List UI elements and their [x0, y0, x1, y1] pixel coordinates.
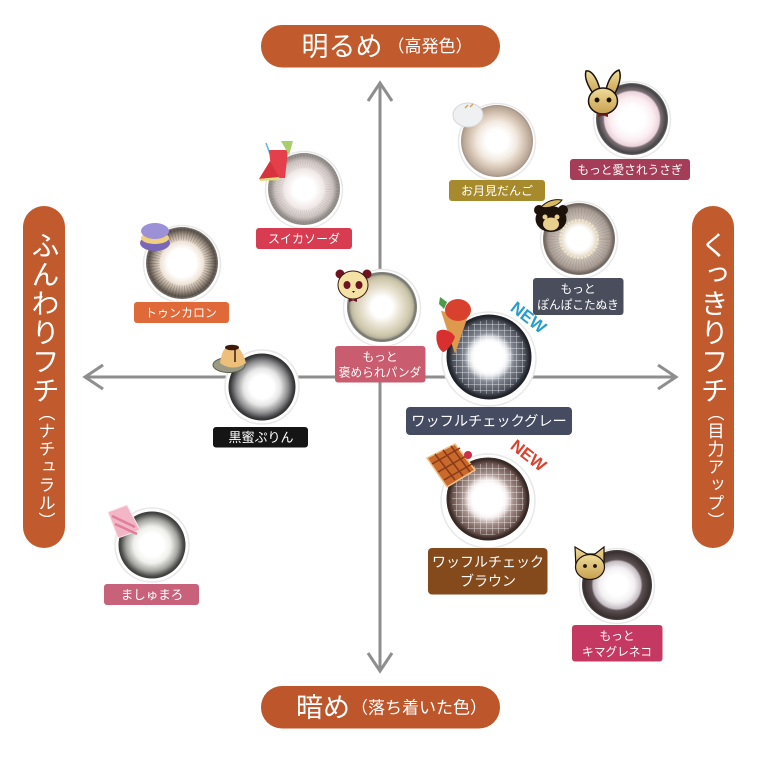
- label: もっとぽんぽこたぬき: ぽんぽこたぬき: [537, 299, 619, 312]
- heading: right くっきりフチ: [692, 206, 734, 548]
- label: 黒蜜ぷりん: [213, 427, 308, 448]
- heading: left ふんわりフチ: ふんわりフチ: [28, 231, 60, 405]
- icon: strawberry crepe: [436, 297, 471, 354]
- icon: white dango rabbit: [453, 103, 483, 127]
- heading: bottom 暗め: 暗め: [296, 693, 350, 723]
- heading: bottom 暗め: （落ち着いた色）: [351, 698, 487, 718]
- lens: もっと愛されうさぎ: [585, 70, 670, 158]
- heading: bottom 暗め: [261, 686, 500, 728]
- lens: もっとぽんぽこたぬき: [534, 200, 618, 278]
- heading: top 明るめ: [261, 25, 500, 68]
- label: もっとぽんぽこたぬき: もっと: [560, 283, 596, 296]
- lens: もっと褒められパンダ: [336, 270, 420, 346]
- lens: ましゅまろ: [108, 505, 189, 582]
- icon: gold rabbit: [585, 70, 620, 117]
- heading: right くっきりフチ: くっきりフチ: [698, 231, 728, 405]
- label: もっと愛されうさぎ: もっと愛されうさぎ: [577, 163, 683, 177]
- icon: panda: [336, 270, 372, 302]
- label: もっとキマグレネコ: [572, 625, 662, 662]
- label: ワッフルチェックブラウン: [428, 548, 548, 594]
- label: もっとぽんぽこたぬき: [533, 278, 624, 315]
- lens: もっとキマグレネコ: [575, 547, 654, 624]
- icon: watermelon soda: [259, 141, 293, 181]
- label: ワッフルチェックブラウン: ワッフルチェック: [432, 554, 544, 570]
- icon: pudding: [213, 345, 246, 372]
- lens: ワッフルチェックグレー: [436, 297, 551, 406]
- label: ワッフルチェックブラウン: ブラウン: [460, 573, 516, 589]
- label: もっと愛されうさぎ: [570, 159, 690, 180]
- axis: horizontal arrow: [85, 365, 676, 389]
- label: ましゅまろ: ましゅまろ: [121, 588, 183, 602]
- lens: ワッフルチェックブラウン: [427, 436, 551, 548]
- icon: marshmallow: [108, 505, 140, 538]
- axis: vertical arrow: [368, 83, 392, 671]
- icon: macaron: [140, 223, 170, 251]
- heading: right くっきりフチ: （目力アップ）: [704, 404, 724, 530]
- lens: お月見だんご: [453, 103, 536, 180]
- label: もっと褒められパンダ: 褒められパンダ: [339, 366, 422, 380]
- label: スイカソーダ: スイカソーダ: [268, 231, 340, 246]
- lens: 黒蜜ぷりん: [213, 345, 299, 424]
- icon: waffle: [427, 444, 475, 487]
- label: スイカソーダ: [256, 228, 352, 249]
- text: NEW badge: NEW: [507, 436, 551, 476]
- lens: スイカソーダ: [259, 141, 342, 228]
- label: もっと褒められパンダ: [335, 346, 426, 382]
- icon: tanuki: [534, 200, 568, 232]
- label: もっとキマグレネコ: もっと: [599, 630, 635, 643]
- label: ワッフルチェックグレー: ワッフルチェックグレー: [411, 414, 567, 430]
- heading: top 明るめ: 明るめ: [302, 32, 382, 62]
- heading: left ふんわりフチ: （ナチュラル）: [36, 404, 55, 530]
- label: トゥンカロン: トゥンカロン: [145, 306, 217, 320]
- text: NEW badge: NEW: [507, 298, 551, 338]
- label: ワッフルチェックグレー: [406, 407, 572, 435]
- label: お月見だんご: [449, 180, 545, 201]
- heading: top 明るめ: （高発色）: [388, 37, 472, 56]
- label: ましゅまろ: [104, 584, 199, 605]
- lens: トゥンカロン: [140, 223, 220, 302]
- heading: left ふんわりフチ: [23, 206, 65, 548]
- label: トゥンカロン: [134, 302, 229, 323]
- label: お月見だんご: お月見だんご: [461, 183, 533, 198]
- label: もっと褒められパンダ: もっと: [362, 351, 398, 364]
- label: もっとキマグレネコ: キマグレネコ: [582, 645, 652, 659]
- label: 黒蜜ぷりん: 黒蜜ぷりん: [228, 430, 294, 445]
- icon: cat: [575, 547, 604, 580]
